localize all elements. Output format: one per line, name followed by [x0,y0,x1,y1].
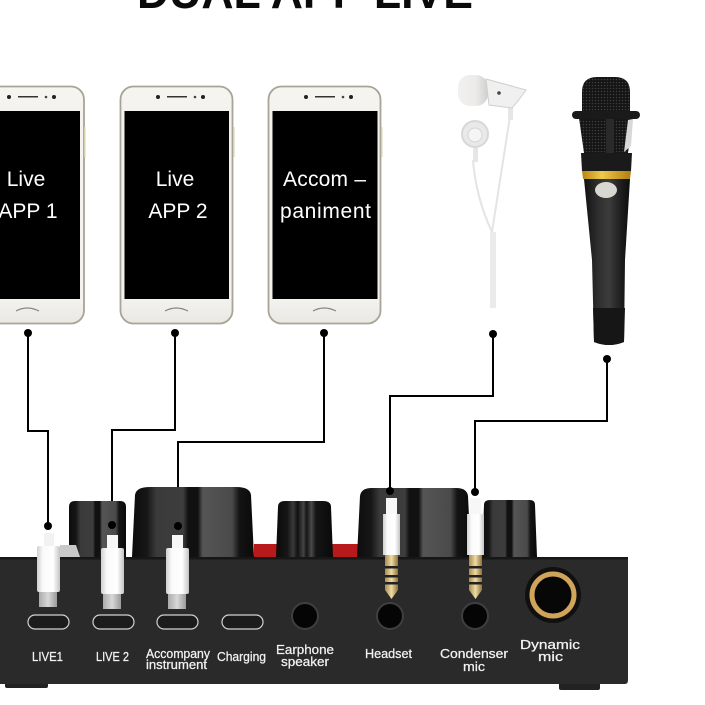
connector dots [24,329,611,363]
port labels: instrument [146,658,208,672]
audio plugs [383,498,484,599]
device front panel [0,557,628,684]
port labels: speaker [281,655,329,669]
port labels: LIVE 2 [96,650,129,664]
port labels: LIVE1 [32,650,63,664]
port labels: mic [538,650,563,664]
phone: Live APP 1: APP 1 [0,200,58,223]
connector lines [28,333,607,526]
micro USB ports [28,615,263,629]
port labels: Dynamic [520,638,580,652]
phone: Live APP 1: Live [7,168,45,191]
sound card device [0,487,628,690]
port labels [32,638,580,674]
3.5mm jacks [292,603,488,629]
icon: white earphones [458,75,526,308]
USB plugs [37,533,189,609]
device feet [5,680,48,688]
phone: Live APP 2: Live [156,168,194,191]
plug connector dots [44,487,479,530]
phone: Accompaniment [268,86,382,324]
port labels: Earphone [276,643,334,657]
phone: Accompaniment: Accom – [283,168,366,191]
phone: Live APP 1 [0,86,86,324]
phone: Accompaniment: paniment [280,200,371,223]
port labels: Condenser [440,647,508,661]
port labels: Headset [365,647,413,661]
icon: black microphone [572,77,640,345]
port labels: Accompany [146,647,211,661]
port labels: Charging [217,650,266,664]
phone: Live APP 2 [120,86,234,324]
knobs [60,487,537,557]
dynamic mic jack [525,567,581,623]
port labels: mic [463,660,485,674]
phone: Live APP 2: APP 2 [148,200,208,223]
